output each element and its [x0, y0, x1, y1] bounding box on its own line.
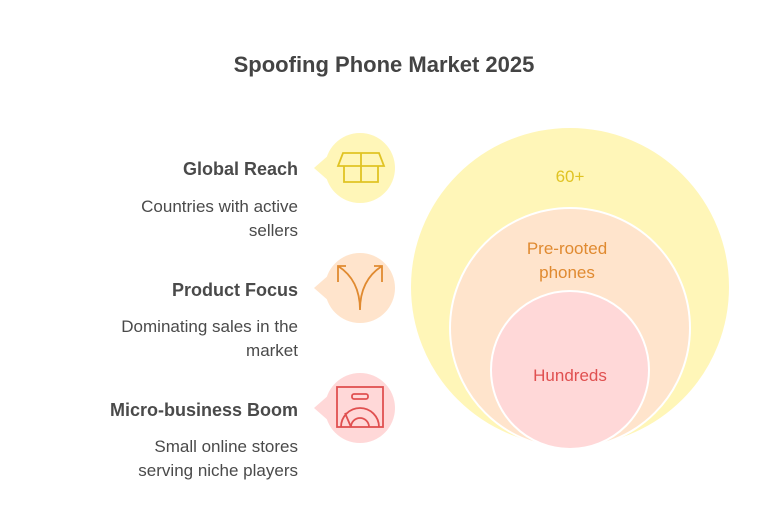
heading: micro-business: Micro-business Boom: [110, 400, 298, 420]
nested circles: Pre-rooted: [527, 239, 607, 258]
title: Spoofing Phone Market 2025: [234, 52, 534, 77]
heading: product focus: Product Focus: [172, 280, 298, 300]
text: product focus: [121, 317, 298, 360]
icon: box: [314, 133, 395, 203]
text: micro-business: [138, 437, 298, 480]
icon: fork: [314, 253, 395, 323]
text: product focus: market: [246, 341, 298, 360]
nested circles: Hundreds: [533, 366, 607, 385]
text: micro-business: serving niche players: [138, 461, 298, 480]
text: global reach: sellers: [249, 221, 298, 240]
text: global reach: Countries with active: [141, 197, 298, 216]
text: product focus: Dominating sales in the: [121, 317, 298, 336]
nested circles: phones: [539, 263, 595, 282]
text: global reach: [141, 197, 298, 240]
text: micro-business: Small online stores: [154, 437, 298, 456]
nested circles: [410, 127, 730, 449]
icon: store: [314, 373, 395, 443]
nested circles: 60+: [556, 167, 584, 186]
heading: global reach: Global Reach: [183, 159, 298, 179]
